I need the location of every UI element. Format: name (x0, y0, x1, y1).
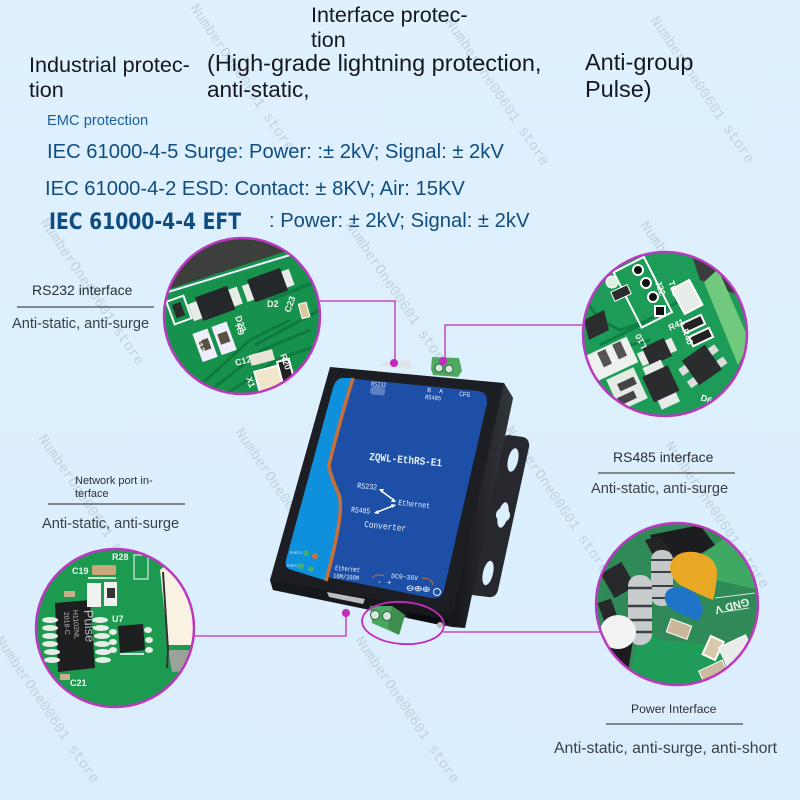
watermarks: NumberOne00601 store (636, 219, 746, 372)
circle: RS232 PCB detail: C12 (234, 354, 252, 368)
power terminal block (370, 606, 405, 635)
callout: network port interface: Network port in- (75, 475, 153, 487)
blue front panel (286, 378, 487, 598)
circle: RS232 PCB detail: D2 (267, 299, 279, 309)
callout: network port interface: Anti-static, anti-surge (42, 516, 179, 532)
circle: RS485 PCB detail: R41 (667, 317, 686, 333)
panel labels: A (439, 388, 443, 395)
circle: RS232 PCB detail: R20 (278, 352, 293, 371)
callout: RS232 interface (12, 282, 154, 332)
panel labels: ⊖⊕⊕ (406, 584, 430, 597)
circle: power interface PCB detail: GND V (713, 595, 750, 616)
panel labels: - + (377, 578, 392, 588)
callout: RS232 interface: RS232 interface (32, 282, 133, 298)
watermarks: NumberOne00601 store (34, 432, 144, 585)
panel labels: Converter (364, 520, 407, 534)
mounting bracket (472, 435, 529, 597)
heading: industrial protection (29, 52, 190, 102)
IEC surge spec: IEC 61000-4-5 Surge: Power: :± 2kV; Signal: ± 2kV (47, 141, 504, 163)
panel labels: RS485 (351, 506, 371, 517)
device: converter (270, 357, 529, 635)
circle: network port PCB detail: Pulse (81, 609, 98, 643)
heading: lightning protection: anti-static, (207, 77, 310, 102)
callout: power interface: Anti-static, anti-surge, anti-short (554, 740, 778, 757)
callout: network port interface: terface (75, 488, 109, 500)
watermarks: NumberOne00601 store (501, 424, 611, 577)
callout: network port interface (42, 475, 185, 532)
panel labels: Ethernet (335, 565, 360, 575)
callout: RS485 interface: Anti-static, anti-surge (591, 481, 728, 497)
IEC EFT spec: IEC 61000-4-4 EFT (49, 210, 241, 235)
panel labels (287, 381, 470, 597)
heading: industrial protection: tion (29, 77, 64, 102)
callout: RS485 interface: RS485 interface (613, 449, 714, 465)
panel labels: ZQWL-EthRS-E1 (369, 452, 443, 470)
circle: RS485 PCB detail: R40 (680, 327, 695, 346)
heading: anti-group pulse: Anti-group (585, 49, 693, 75)
panel labels: DC9~36V (391, 573, 419, 583)
IEC EFT spec: : Power: ± 2kV; Signal: ± 2kV (269, 210, 530, 232)
device body (270, 367, 513, 628)
heading: interface protection: tion (311, 28, 346, 52)
heading: lightning protection (207, 50, 541, 102)
panel labels: Ethernet (398, 499, 430, 511)
panel labels: PORT2 (287, 565, 300, 569)
heading: interface protection (311, 3, 468, 52)
circle: network port PCB detail: C21 (70, 678, 87, 688)
device rear connectors (380, 357, 462, 377)
circle: network port PCB detail: U7 (112, 614, 124, 624)
heading: anti-group pulse: Pulse) (585, 76, 652, 102)
circle: RS232 PCB detail: R9 (233, 322, 246, 337)
circle: network port PCB detail: H1102NL (71, 610, 80, 639)
heading: interface protection: Interface protec- (311, 3, 468, 27)
circle: power interface PCB detail (590, 520, 765, 690)
circle: network port PCB detail (34, 548, 196, 708)
IEC EFT spec (49, 210, 530, 235)
panel labels: B (427, 387, 431, 394)
watermarks: NumberOne00601 store (661, 439, 771, 592)
watermarks: NumberOne00601 store (186, 2, 296, 155)
callout: RS485 interface (591, 449, 735, 497)
watermarks: NumberOne00601 store (441, 16, 551, 169)
circle: network port PCB detail: 2018-C (62, 612, 70, 635)
watermarks: NumberOne00601 store (341, 219, 451, 372)
watermarks: NumberOne00601 store (36, 216, 146, 369)
heading: anti-group pulse (585, 49, 693, 102)
circle: network port PCB detail: C19 (72, 566, 89, 576)
callout: power interface: Power Interface (631, 702, 717, 716)
circle: RS232 PCB detail: D23 (233, 314, 248, 333)
callout: RS232 interface: Anti-static, anti-surge (12, 316, 149, 332)
panel labels: RS232 (371, 381, 386, 390)
connector lines (194, 301, 600, 647)
circle: RS485 PCB detail: J22 (653, 279, 668, 297)
circle: RS232 PCB detail: C23 (282, 295, 298, 314)
circle: RS485 PCB detail: D6 (699, 392, 714, 406)
watermarks: NumberOne00601 store (646, 14, 756, 167)
heading: lightning protection: (High-grade lightning protection, (207, 50, 541, 76)
panel labels: CFG (459, 391, 470, 400)
IEC ESD spec: IEC 61000-4-2 ESD: Contact: ± 8KV; Air: 15KV (45, 178, 465, 200)
circle: RS232 PCB detail (160, 230, 325, 400)
circle: network port PCB detail: R28 (112, 552, 129, 562)
heading: industrial protection: Industrial protec- (29, 52, 190, 77)
panel labels: 10M/100M (333, 573, 359, 583)
panel labels: PORT1 (290, 552, 303, 556)
watermarks: NumberOne00601 store (351, 634, 461, 787)
circle: RS232 PCB detail: X1 (244, 375, 257, 389)
panel labels: RS485 (425, 394, 441, 402)
watermarks: NumberOne00601 store (231, 426, 341, 579)
EMC protection text: EMC protection (47, 113, 148, 129)
callout: power interface (554, 702, 778, 757)
circle: RS485 PCB detail: T02 (666, 279, 681, 297)
panel labels: RS232 (357, 482, 378, 493)
circle: RS485 PCB detail (580, 250, 750, 420)
circle: RS232 PCB detail: R13 (192, 335, 207, 354)
circle: RS485 PCB detail: L10 (633, 332, 649, 350)
